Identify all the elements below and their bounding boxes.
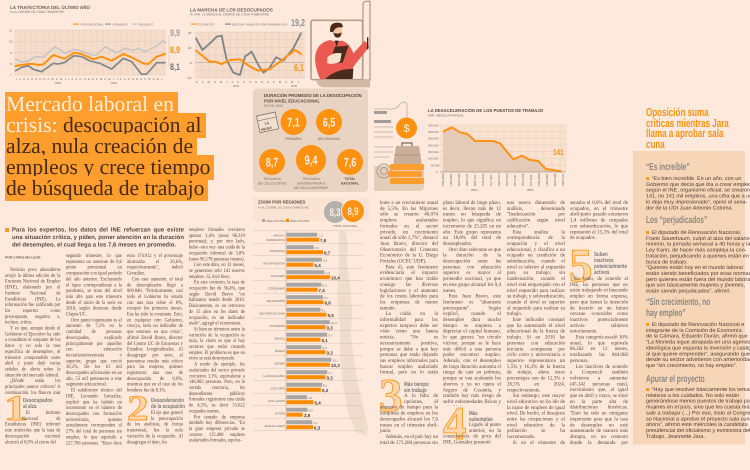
sidebar title: [646, 107, 729, 151]
chart: zoom por regiones: 5,0: [308, 408, 313, 412]
chart: zoom por regiones: ANTOFAGASTA: [263, 262, 285, 266]
icon: calendar: 7,6: [264, 121, 270, 126]
chart: la trayectoria del ultimo ano: 11: [9, 28, 12, 32]
heading: suben inactivos potencialmente activos: activos: [594, 268, 610, 276]
panel: duracion promedio de la desocupacion: [253, 88, 368, 192]
sidebar text: los perjudicados: Frank Sauerbaum, culpó al alza del salario: [646, 235, 749, 241]
heading: desaceleracion de la ocupacion: [151, 396, 185, 410]
chart: zoom por regiones: 10,3: [331, 321, 337, 325]
sidebar heading: sin crecimiento no hay empleo: “Sin crecimiento, no: [646, 297, 710, 308]
text column 8: sentaba el 0,9% del total de ocupados, en el trimestre abril-junio pasado existieron 1,4 millones de ocupados con sobreeducación, lo que representó el 15,3% del total de ocupados.: [570, 200, 628, 240]
text column 6 continued: Ligado al punto anterior, en la consecuencia de poca del INE, González presentó: [443, 422, 501, 445]
number 1: 1: [4, 388, 27, 428]
panel: duracion promedio de la desocupacion: 7,1: [287, 116, 300, 130]
chart: zoom por regiones: COQUIMBO: [268, 286, 286, 290]
sidebar text: apurar el proyecto: Trabajo, Jeannette Jara.: [646, 433, 705, 439]
chart: la trayectoria del ultimo ano: % AL CIERRE DE CADA TRIMESTRE: [10, 10, 64, 14]
panel: duracion promedio de la desocupacion: NACIONAL: [341, 182, 359, 186]
text column 3: Con este aumento, el total de desempleados llegó a 909.840. "Prácticamente, casi todo el Gobierno ha estado con una tasa sobre el 8%, excepto los primeros meses. Esa ha sido la constante. Esto, en cualquier otro Gobierno, concya, sería un indicador de que estamos en una crisis", afirmó David Bravo, director del Centro UC de Encuestas y Estudios Longitudinales. Al desagregar por sexo, el panorama resulta más crítico para las mujeres, quienes registraron una tasa de desocupación de 9,9%, mientras que en el caso de los hombres fue de 8,1%.: [127, 275, 183, 392]
text column 4: [189, 226, 245, 443]
sidebar text: sin crecimiento: al que quiere emprender”, asegurando que: [646, 351, 750, 357]
sidebar text: es increible: [646, 176, 750, 211]
sidebar text: es increible: Gobierno que decía que iba a crear empleo,: [646, 181, 750, 187]
chart: zoom por regiones: ATACAMA: [271, 274, 285, 278]
chart: zoom por regiones: 8,9: [347, 206, 359, 218]
chart: zoom por regiones: ARICA Y: [273, 234, 285, 238]
chart: la desaceleracion de los puestos de trabajo: JUL-SEP: [489, 174, 493, 186]
sidebar text: apurar el proyecto: “Hay que resolver básicamente los temas: [652, 386, 750, 392]
chart: la desaceleracion de los puestos de trabajo: 100.000: [428, 157, 439, 161]
chart: la desaceleracion de los puestos de trabajo: SEP-NOV: [505, 173, 509, 186]
sidebar text: apurar el proyecto: presidencial del oficialismo y exministra del: [646, 427, 750, 433]
text column 6: Otro dato relevante es que la duración de la desocupación entre las personas con educación superior es mayor al promedio nacional, ya que en este grupo alcanzó los 9,4 meses.: [443, 246, 501, 293]
chart: la trayectoria del ultimo ano: 8,9: [170, 45, 180, 56]
panel: duracion promedio de la desocupacion: ENTRE 2025: [264, 104, 283, 108]
chart: zoom por regiones: 8,7: [324, 296, 329, 300]
chart: la trayectoria del ultimo ano: LA TRAYECTORIA DEL ÚLTIMO AÑO: [10, 4, 90, 10]
number 2: 2: [127, 388, 149, 428]
text column 3: eran 174.912 y el porcentaje alcanzaba el 20,6%, respectivamente", indicó González.: [127, 252, 183, 276]
chart: la trayectoria del ultimo ano: 9,9: [170, 28, 180, 39]
text column 8 continued: En tanto, de acuerdo al INE, las personas que no están trabajando ni buscando empleo en forma expresa, pero que tienen la intención de hacerlo en un futuro cercano -conocidos como inactivos potencialmente activos- subieron notoriamente.: [570, 276, 628, 334]
sidebar text: apurar el proyecto: ahora”, afirmó este miércoles la candidata: [646, 422, 748, 428]
sidebar heading: apurar el proyecto: Apurar el proyecto: [646, 374, 705, 385]
panel: duracion promedio de la desocupacion: 8,7: [266, 156, 278, 170]
chart: zoom por regiones: 7,4: [318, 288, 325, 293]
panel: duracion promedio de la desocupacion: PRIMARIA: [285, 137, 302, 141]
sidebar text: los perjudicados: Ley Karin, de hacer más compleja la con-: [646, 247, 746, 253]
sidebar text: los perjudicados: tratación, perjudicando a quienes están en: [646, 252, 749, 258]
chart: la trayectoria del ultimo ano: [9, 4, 180, 85]
chart: zoom por regiones: 8,3: [329, 207, 341, 219]
sidebar text: sin crecimiento: El diputado de Renovación Nacional e: [652, 322, 744, 328]
chart: zoom por regiones: 7,3: [318, 234, 323, 238]
text column 8 continued: Esta categoría escaló 10% anual, lo que equivale 86.262 en 12 meses, totalizando las 944.060 personas.: [570, 334, 628, 363]
byline: POR CAROLINA LEÓN: [5, 256, 40, 260]
chart: la marcha de los desocupados: 2025: [291, 85, 297, 88]
chart: la trayectoria del ultimo ano: 2024: [55, 82, 61, 85]
panel: duracion promedio de la desocupacion: DE CICLO CORTO: [258, 182, 287, 186]
chart: zoom por regiones: 6,4: [314, 400, 321, 405]
chart: la desaceleracion de los puestos de trabajo: FEB-ABR: [449, 174, 453, 186]
sidebar title: Oposición suma: [646, 107, 709, 119]
panel: duracion promedio de la desocupacion: 6,5: [323, 116, 335, 130]
chart: la trayectoria del ultimo ano: MUJERES: [139, 22, 153, 26]
sidebar title: cuna: [646, 139, 665, 151]
icon: briefcase, coin and document: $: [403, 123, 410, 135]
chart: la desaceleracion de los puestos de trabajo: DIC-FEB: [529, 175, 533, 186]
chart: la marcha de los desocupados: 2024: [233, 85, 239, 88]
chart: zoom por regiones: 8,4: [323, 258, 328, 262]
text column 5: Para él, este fenómeno evidenciaría el impacto económico que han traído consigo las diversas legislaciones y el aumento de los costos laborales para las empresas de menor tamaño.: [380, 263, 438, 310]
chart: la desaceleracion de los puestos de trabajo: VAR. ABSOLUTA ANUAL: [428, 114, 464, 118]
panel: duracion promedio de la desocupacion: TOTAL: [344, 177, 356, 181]
chart: la trayectoria del ultimo ano: 9: [10, 51, 12, 55]
panel: duracion promedio de la desocupacion: 9,4: [304, 152, 318, 168]
chart: zoom por regiones: 8,1: [322, 308, 326, 312]
sidebar heading: sin crecimiento no hay empleo: hay empleo”: [646, 308, 686, 319]
sidebar text: sin crecimiento: que “sin crecimiento, no hay empleo”.: [646, 362, 737, 368]
icon: calendar: MESES: [261, 126, 272, 132]
chart: la desaceleracion de los puestos de trabajo: 50.000: [431, 163, 440, 167]
chart: zoom por regiones: 6,5: [315, 246, 320, 250]
chart: la marcha de los desocupados: 0: [190, 61, 192, 65]
sidebar text: sin crecimiento: integrante de la Comisión de Economía: [646, 327, 742, 333]
sidebar text: los perjudicados: mínimo, la jornada semanal a 40 horas y la: [646, 241, 750, 247]
text column 5: lente a un crecimiento anual de 5,5%. En las Mipymes sólo se crearon 46.074 empleos asalariados formales en el sector privado, un crecimiento anual de sólo 1,7%", destacó Juan Bravo, director del Observatorio del Contexto Económico de la U. Diego Portales (OCEC UDP).: [380, 200, 438, 264]
chart: la desaceleracion de los puestos de trabajo: LA DESACELERACIÓN DE LOS PUESTOS DE TRABAJO: [428, 108, 544, 113]
chart: zoom por regiones: ZOOM POR REGIONES: [258, 200, 305, 204]
chart: zoom por regiones: LA ARAUCANÍA: [263, 374, 285, 378]
sidebar text: es increible: dor de la UDI Juan Antonio Coloma.: [646, 205, 733, 211]
chart: la desaceleracion de los puestos de trabajo: 200.000: [428, 143, 439, 147]
chart: zoom por regiones: 9,3: [326, 375, 333, 380]
panel: duracion promedio de la desocupacion: DURACIÓN PROMEDIO DE LA DESOCUPACIÓN: [264, 93, 362, 98]
chart: la marcha de los desocupados: 19,2: [291, 18, 305, 29]
chart: la desaceleracion de los puestos de trabajo: 2025: [527, 188, 534, 192]
heading: desocupados al alza: al alza: [22, 402, 36, 410]
sidebar text: sin crecimiento: [646, 322, 750, 368]
chart: zoom por regiones: ABR-JUN 2025: [290, 219, 310, 223]
chart: zoom por regiones: 8,2: [322, 388, 329, 393]
text column 3 continued: El eje que generó la preocupación de los analistas, de forma transversal, fue la nula variación de la ocupación. Al desagregar el dato, los: [127, 410, 183, 444]
text column 2: segundo trimestre, lo que representa un aumento de 0,6 punto porcentual en comparación con igual período del año anterior. Excluyendo el lapso correspondiente a la pandemia, se trata del nivel más alto para este trimestre desde el inicio de la serie en 2010, según destacan desde Clapes/UC.: [66, 252, 122, 317]
number 4: 4: [443, 398, 466, 450]
sidebar heading: es increible: “Es increíble”: [646, 162, 690, 173]
sidebar heading: los perjudicados: Los “perjudicados”: [646, 215, 707, 226]
icon: calendar: [257, 112, 279, 133]
chart: zoom por regiones: 8,7: [324, 250, 331, 255]
chart: zoom por regiones: ÑUBLE: [275, 349, 285, 353]
sidebar text: los perjudicados: El diputado de Renovación Nacional,: [652, 229, 741, 235]
chart: la marcha de los desocupados: 6,1: [294, 63, 304, 74]
chart: la desaceleracion de los puestos de trabajo: MAR-MAY: [553, 173, 557, 186]
chart: zoom por regiones: [253, 197, 369, 436]
chart: la trayectoria del ultimo ano: 2025: [111, 82, 117, 85]
sidebar text: es increible: lo deja muy impresionado”, opinó el sena-: [646, 199, 747, 205]
text column 4: Si bien en términos netos la variación de la ocupación es nula, la cierto es que sí hay sectores que están creando empleo. El problema es que en otros se está destruyendo.: [189, 325, 245, 361]
chart: la desaceleracion de los puestos de trabajo: 300.000: [428, 130, 439, 134]
chart: zoom por regiones: 8,3: [322, 346, 327, 350]
chart: zoom por regiones: BIOBÍO: [275, 362, 286, 366]
chart: zoom por regiones: 6,4: [314, 263, 321, 268]
chart: zoom por regiones: 6,3: [314, 425, 321, 430]
chart: la trayectoria del ultimo ano: 8: [10, 62, 12, 66]
text column 1 continued: El Instituto Nacional de Estadísticas (INE) informó este miércoles que la tasa de desocupación nacional alcanzó el 8,9% al cierre del: [5, 410, 60, 444]
chart: zoom por regiones: % AL CIERRE DE CADA TRIMESTRE: [258, 206, 309, 210]
chart: la desaceleracion de los puestos de trabajo: MAR-MAY: [457, 173, 461, 186]
chart: la desaceleracion de los puestos de trabajo: [428, 108, 566, 192]
panel: duracion promedio de la desocupacion: TERCIARIA: [302, 177, 321, 181]
text column 7: Esta analiza la correspondencia de la ocupación y el nivel educacional, y clasifica a un ocupado en condición de subeducación, cuando el nivel es inferior al requerido para su trabajo; sin inadecuación, cuando el nivel está emparejado con el nivel requerido para realizar su trabajo, y sobreeducación, cuando el nivel es superior al requerido para realizar su trabajo.: [507, 228, 565, 316]
text column 8 continued: [570, 276, 628, 446]
text column 2: Otro punto inquietante es el aumento de 7,2% en la cantidad de personas desocupadas, explicado principalmente por aquellos con educación terciaria/universitaria o superior, grupo que creció 30,2%. De los 61 mil desocupados adicionales en un año, 53 mil pertenecen a este segmento educacional.: [66, 316, 122, 387]
chart: zoom por regiones: 6,1: [313, 421, 318, 425]
text column 4: A modo de ejemplo, los asalariados del sector privado crecieron 3,1%, equivalente a 146.983 personas. Pero, en la vereda contraria, los dependientes públicos formales registraron una caída de 4,5%, es decir 53.622 ocupados menos.: [189, 361, 245, 413]
sidebar text: sin crecimiento: de la Cámara, Eduardo Durán, afirmó que: [646, 333, 748, 339]
heading: desaceleracion de la ocupacion: de la ocupación: [151, 402, 185, 410]
text column 2: [66, 252, 122, 446]
chart: la desaceleracion de los puestos de trabajo: ENE-MAR: [537, 173, 541, 186]
heading: mas subempleo: Más: [469, 410, 478, 416]
chart: la desaceleracion de los puestos de trabajo: OCT-DIC: [513, 174, 517, 186]
sidebar text: apurar el proyecto: salir a trabajar (...) Por eso, insto al Congre-: [646, 410, 750, 416]
sidebar text: los perjudicados: “Quienes están hoy en el mundo laboral: [646, 264, 743, 270]
chart: la desaceleracion de los puestos de trabajo: NOV-ENE: [521, 173, 525, 186]
heading: desaceleracion de la ocupacion: Desaceleración: [151, 396, 184, 404]
text column 6: plazo laboral de largo plazo, es decir, llevan más de 12 meses en búsqueda de empleo, lo que significa un incremento de 25.205 en un año. Este grupo representa un 18,8% del total de desempleados.: [443, 200, 501, 246]
chart: zoom por regiones: 7,8: [320, 238, 327, 243]
chart: zoom por regiones: LOS LAGOS: [268, 399, 285, 403]
text column 7: una nueva dimensión de análisis, denominada "Inadecuación por calificación según nivel educativo".: [507, 200, 565, 228]
heading: mas tiempo sin trabajo: Más tiempo: [404, 380, 429, 388]
chart: la trayectoria del ultimo ano: TASA NACIONAL: [80, 22, 104, 26]
chart: la desaceleracion de los puestos de trabajo: ABR-JUN: [561, 174, 565, 186]
chart: zoom por regiones: TOTAL NACIONAL: [333, 224, 358, 228]
chart: zoom por regiones: 9,3: [326, 350, 333, 355]
chart: zoom por regiones: ABR-JUN 2024: [266, 219, 286, 223]
chart: la marcha de los desocupados: [187, 8, 305, 88]
sidebar text: sin crecimiento: desde su sector advirtieron con anterioridad: [646, 357, 750, 363]
chart: zoom por regiones: 9,7: [328, 334, 333, 338]
chart: zoom por regiones: VALPARAÍSO: [266, 299, 286, 303]
chart: zoom por regiones: 8,3: [322, 284, 327, 288]
chart: la marcha de los desocupados: CESANTES: [198, 22, 214, 26]
illustration: man with tablet in laptop frame: [311, 1, 370, 87]
panel: duracion promedio de la desocupacion: UNIVERSITARIA O: [297, 182, 326, 186]
heading: suben inactivos potencialmente activos: potencialmente: [594, 262, 627, 270]
sidebar text: los perjudicados: están siendo beneficiados por esas normas,: [646, 270, 750, 276]
chart: la desaceleracion de los puestos de trabajo: AGO-OCT: [497, 173, 501, 186]
chart: la desaceleracion de los puestos de trabajo: 141: [553, 147, 564, 157]
heading: desocupados al alza: Desocupados: [22, 396, 52, 404]
text column 7: Este indicador constató que ha aumentado el nivel educacional de la fuerza de trabajo. Si en 2010 las personas con educación terciaria -compuesta por ciclo corto y universitaria o superior- representaron un 5,5% y 16,2% de la fuerza de trabajo, ahora estos porcentajes son de 12,3% y 26,5% en 2024, respectivamente.: [507, 316, 565, 392]
chart: la desaceleracion de los puestos de trabajo: ABR-JUN: [465, 174, 469, 186]
text column 7: [507, 200, 565, 446]
sidebar text: los perjudicados: [646, 229, 750, 294]
chart: zoom por regiones: 8,5: [323, 384, 328, 388]
chart: la marcha de los desocupados: -10: [187, 76, 192, 80]
chart: zoom por regiones: AYSÉN: [275, 412, 285, 416]
heading: mas tiempo sin trabajo: [404, 380, 429, 394]
sidebar text: es increible: “Es bien increíble. En un año, con un: [652, 176, 741, 182]
text column 7: Sin embargo, este mayor nivel educativo no ha ido de la mano de empleos de igual nivel. De hecho, el desajuste entre las ocupaciones y el nivel educativo de la población se ha incrementado.: [507, 392, 565, 439]
heading: desocupados al alza: [22, 396, 52, 410]
number 5: 5: [569, 240, 592, 292]
chart: zoom por regiones: MAULE: [275, 336, 285, 340]
sidebar text: los perjudicados: están siendo perjudicados”, afirmó.: [646, 288, 731, 294]
panel: duracion promedio de la desocupacion: DE CICLO SUPERIOR: [294, 186, 328, 190]
chart: la trayectoria del ultimo ano: 10: [9, 40, 13, 44]
chart: la marcha de los desocupados: % VAR. 12 MESES AL CIERRE DE CADA TRIMESTRE: [190, 12, 269, 16]
chart: la marcha de los desocupados: 20: [188, 31, 192, 35]
chart: la desaceleracion de los puestos de trabajo: 0: [436, 170, 438, 174]
chart: zoom por regiones: O'HIGGINS: [269, 324, 285, 328]
chart: la desaceleracion de los puestos de trabajo: 2024: [471, 188, 478, 192]
chart: la desaceleracion de los puestos de trabajo: ENE-MAR: [441, 173, 445, 186]
chart: zoom por regiones: 9,5: [328, 313, 334, 318]
chart: la marcha de los desocupados: LA MARCHA DE LOS DESOCUPADOS: [190, 8, 273, 12]
sidebar heading: sin crecimiento no hay empleo: [646, 297, 710, 319]
chart: la desaceleracion de los puestos de trabajo: 150.000: [428, 150, 439, 154]
chart: zoom por regiones: 3,8: [304, 413, 311, 418]
chart: zoom por regiones: PARINACOTA: [266, 238, 285, 242]
chart: la marcha de los desocupados: BUSCAN TRABAJO POR PRIMERA VEZ: [232, 22, 288, 26]
sidebar title: críticas mientras Jara: [646, 118, 729, 130]
heading: mas subempleo: [469, 410, 493, 422]
chart: zoom por regiones: 10,3: [331, 363, 340, 368]
chart: la desaceleracion de los puestos de trabajo: FEB-ABR: [545, 174, 549, 186]
panel: duracion promedio de la desocupacion: 7,6: [344, 156, 356, 170]
heading: suben inactivos potencialmente activos: [594, 250, 627, 276]
text column 5 continued: A la falta de opciones, el aumento de tiempo para la búsqueda de empleos en los desocupados alcanzó los 7,6 meses en el trimestre abril-junio.: [380, 392, 438, 433]
sidebar title: llama a aprobar sala: [646, 128, 723, 140]
text column 4: En este contexto, la tasa de ocupación fue de 56,4%, que según David Bravo "no habíamos tenido desde 2010. Básicamente, es un retroceso de 15 años en los datos de ocupación, es un indicador malo", agregó el economista.: [189, 279, 245, 326]
sidebar text: apurar el proyecto: mujeres en el país, sino que les cuesta más: [646, 404, 750, 410]
chart: zoom por regiones: 9,7: [328, 371, 333, 375]
title: Mercado laboral en crisis: desocupación al alza, nula creación de empleos y crece tiempo de búsqueda de trabajo: [6, 92, 210, 200]
chart: zoom por regiones: LOS RÍOS: [271, 386, 285, 390]
chart: la trayectoria del ultimo ano: 8,1: [170, 62, 180, 73]
sidebar text: los perjudicados: que son básicamente mujeres y jóvenes,: [646, 282, 745, 288]
chart: la desaceleracion de los puestos de trabajo: 250.000: [428, 137, 439, 141]
chart: la desaceleracion de los puestos de trabajo: MAY-JUL: [473, 174, 477, 186]
chart: zoom por regiones: 8,1: [322, 338, 328, 343]
chart: la trayectoria del ultimo ano: HOMBRES: [112, 22, 128, 26]
chart: zoom por regiones: 9,0: [326, 271, 330, 275]
chart: zoom por regiones: 10,7: [332, 358, 339, 362]
panel: sidebar background: [633, 151, 745, 444]
map of Chile: [337, 230, 368, 436]
chart: zoom por regiones: 10,4: [331, 275, 340, 280]
number 3: 3: [379, 370, 402, 422]
text column 4: Por tamaño de empresa también hay diferencias. "En la gran empresa privada se crearon 135.408 empleos asalariados formales, equiva-: [189, 413, 245, 443]
sidebar text: los perjudicados: pero quienes están fuera del mundo laboral,: [646, 276, 750, 282]
text column 1: Noticias poco alentadoras arrojó la última edición de la Encuesta Nacional de Empleo (ENE), elaborado por el Instituto Nacional de Estadísticas (INE). La información fue calificada por los expertos como preocupante, negativa e, incluso, crítica.: [5, 266, 60, 325]
sidebar text: apurar el proyecto: so Nacional a aprobar el proyecto sala cuna: [646, 416, 750, 422]
text column 5 continued: Además, en el país hay un total de 171.284 personas sin: [380, 433, 438, 445]
chart: la marcha de los desocupados: 10: [188, 46, 192, 50]
heading: suben inactivos potencialmente activos: Suben: [594, 250, 608, 258]
chart: la trayectoria del ultimo ano: JJASONDEFMAMJJASONDEFMAMJJASONDEFMAMJ: [16, 78, 165, 81]
text column 1: [5, 266, 60, 394]
lead paragraph: Para los expertos, los datos del INE refuerzan que existe una situación crítica, y piden, poner atención en la duración del desempleo, el cual llega a los 7,6 meses en promedio.: [12, 226, 184, 247]
text column 1: Y es que, aunque desde el Gobierno el Ejecutivo ha sido a considerar el conjunto de los datos -y no solo la tasa específica de desempleo-, el trimestre comprendido entre abril y junio dejó varias señales de alerta sobre la situación del mercado laboral.: [5, 325, 60, 377]
chart: zoom por regiones: METROPOLITANA: [260, 312, 285, 316]
chart: la trayectoria del ultimo ano: 7: [10, 73, 12, 77]
chart: zoom por regiones: 9,3: [326, 325, 333, 330]
chart: zoom por regiones: MAGALLANES: [265, 424, 285, 428]
chart: zoom por regiones: 4,9: [308, 396, 313, 400]
sidebar text: es increible: según el INE, organismo oficial, se crearon: [646, 187, 750, 193]
chart: zoom por regiones: TARAPACÁ: [269, 249, 285, 253]
sidebar text: apurar el proyecto: [646, 386, 750, 440]
icon: briefcase, coin and document: [374, 102, 424, 191]
sidebar text: apurar el proyecto: relativos a los cuidados. No solo están: [646, 392, 739, 398]
sidebar text: los perjudicados: busca de trabajo.: [646, 258, 688, 264]
heading: mas tiempo sin trabajo: sin trabajo: [404, 386, 427, 394]
sidebar text: sin crecimiento: “La Moneda sigue atrapada en una agenda: [646, 339, 750, 345]
panel: duracion promedio de la desocupacion: POR NIVEL EDUCACIONAL: [264, 98, 320, 104]
chart: la desaceleracion de los puestos de trabajo: JUN-AGO: [481, 173, 485, 186]
panel: duracion promedio de la desocupacion: SECUNDARIA: [318, 137, 341, 141]
text column 5: [380, 200, 438, 375]
text column 4: Con este dato, en 12 meses, se generaron solo 141 nuevos empleos. Sí, leyó bien.: [189, 261, 245, 279]
panel: duracion promedio de la desocupacion: TERCIARIA: [263, 177, 282, 181]
text column 4: empleos formales crecieron apenas 1,4% (unos 96.319 personas); y, por otro lado, hubo -otra vez- una caída de la ocupación informal de 3,8% (unos 96.178 personas menos).: [189, 226, 245, 261]
heading: mas subempleo: subempleo: [469, 416, 493, 422]
chart: zoom por regiones: 8,8: [324, 300, 331, 305]
heading: suben inactivos potencialmente activos: inactivos: [594, 256, 614, 264]
text column 6: [443, 200, 501, 406]
chart: la desaceleracion de los puestos de trabajo: 350.000: [428, 124, 439, 128]
chart: la marcha de los desocupados: EFMAMJJASONDEFMAMJ: [196, 81, 303, 84]
